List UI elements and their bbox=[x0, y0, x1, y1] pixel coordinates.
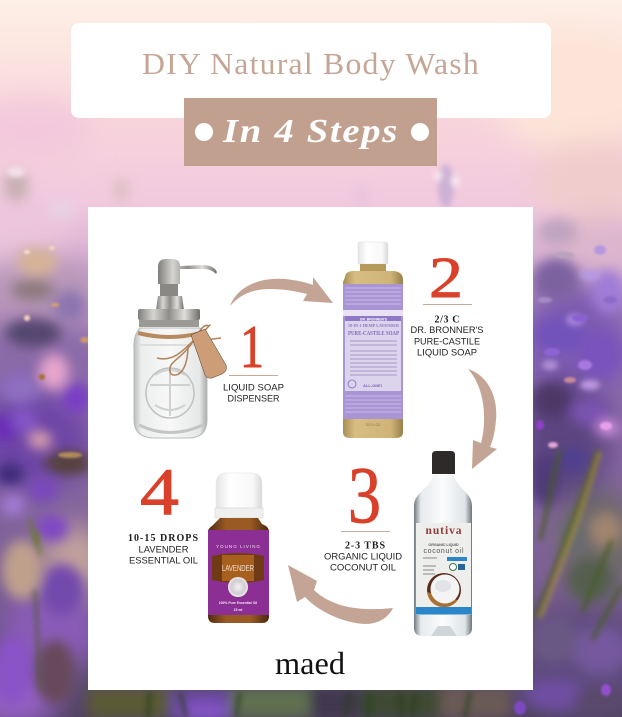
icon: Dr. Bronner's soap bottle: 18-IN-1 HEMP LAVENDER bbox=[348, 323, 400, 328]
step 2 label bbox=[410, 245, 484, 358]
step 4 label: 4 bbox=[140, 455, 179, 529]
logo: maed: maed bbox=[275, 645, 345, 681]
left column masses bbox=[17, 248, 57, 276]
icon: Dr. Bronner's soap bottle bbox=[343, 242, 403, 438]
step 2 label: PURE-CASTILE bbox=[414, 336, 480, 346]
icon: mason jar soap dispenser bbox=[134, 259, 226, 438]
icon: Dr. Bronner's soap bottle: 32 FL OZ bbox=[366, 423, 381, 427]
arrow: step 1 to step 2 bbox=[230, 277, 333, 306]
icon: kraft paper tag bbox=[191, 329, 226, 378]
icon: Dr. Bronner's soap bottle: PURE-CASTILE SOAP bbox=[348, 330, 399, 337]
step 1 label bbox=[223, 314, 284, 404]
arrow: step 2 to step 3 bbox=[468, 369, 497, 469]
step 2 label: 2/3 C bbox=[434, 314, 460, 326]
step 3 label: 3 bbox=[348, 452, 381, 540]
step 2 label: LIQUID SOAP bbox=[417, 348, 477, 358]
step 4 label: ESSENTIAL OIL bbox=[129, 556, 198, 566]
text: nutiva brand: nutiva bbox=[426, 525, 462, 537]
icon: Young Living lavender oil bottle: YOUNG LIVING bbox=[216, 544, 260, 549]
bottom strip masses bbox=[88, 688, 178, 717]
pale flowers above panel bbox=[3, 170, 29, 202]
step 2 label: DR. BRONNER'S bbox=[410, 325, 484, 335]
arrow: step 3 to step 4 bbox=[288, 565, 393, 624]
step 1 label: DISPENSER bbox=[228, 394, 280, 404]
icon: Nutiva coconut oil bottle bbox=[414, 451, 472, 636]
icon: Young Living lavender oil bottle: 100% Pure Essential Oil bbox=[219, 601, 257, 605]
banner: In 4 Steps bbox=[184, 98, 437, 166]
step 1 label: 1 bbox=[240, 314, 264, 380]
heading: DIY Natural Body Wash: DIY Natural Body Wash bbox=[142, 46, 480, 81]
step 4 label: LAVENDER bbox=[138, 544, 189, 554]
step 3 label bbox=[324, 452, 402, 572]
icon: Dr. Bronner's soap bottle: DR. BRONNER'S bbox=[360, 318, 388, 322]
step 3 label: COCONUT OIL bbox=[330, 562, 396, 572]
step 4 label: 10-15 DROPS bbox=[128, 533, 198, 544]
icon: Dr. Bronner's soap bottle: ALL-ONE! bbox=[363, 383, 382, 388]
icon: Nutiva coconut oil bottle: coconut oil bbox=[424, 548, 464, 555]
step 3 label: ORGANIC LIQUID bbox=[324, 552, 402, 562]
panel: title card bbox=[71, 23, 551, 118]
step 1 label: LIQUID SOAP bbox=[223, 382, 284, 392]
right column masses bbox=[538, 218, 578, 246]
banner: In 4 Steps: In 4 Steps bbox=[222, 113, 399, 150]
step 4 label bbox=[128, 455, 198, 566]
icon: Young Living lavender oil bottle bbox=[208, 473, 269, 623]
icon: Nutiva coconut oil bottle: ORGANIC LIQUID bbox=[428, 543, 459, 547]
icon: Young Living lavender oil bottle: 15 ml bbox=[234, 608, 242, 612]
step 3 label: 2-3 TBS bbox=[345, 540, 385, 552]
step 2 label: 2 bbox=[429, 245, 463, 310]
panel: steps card bbox=[88, 207, 533, 690]
icon: Young Living lavender oil bottle: LAVENDER bbox=[222, 564, 254, 573]
